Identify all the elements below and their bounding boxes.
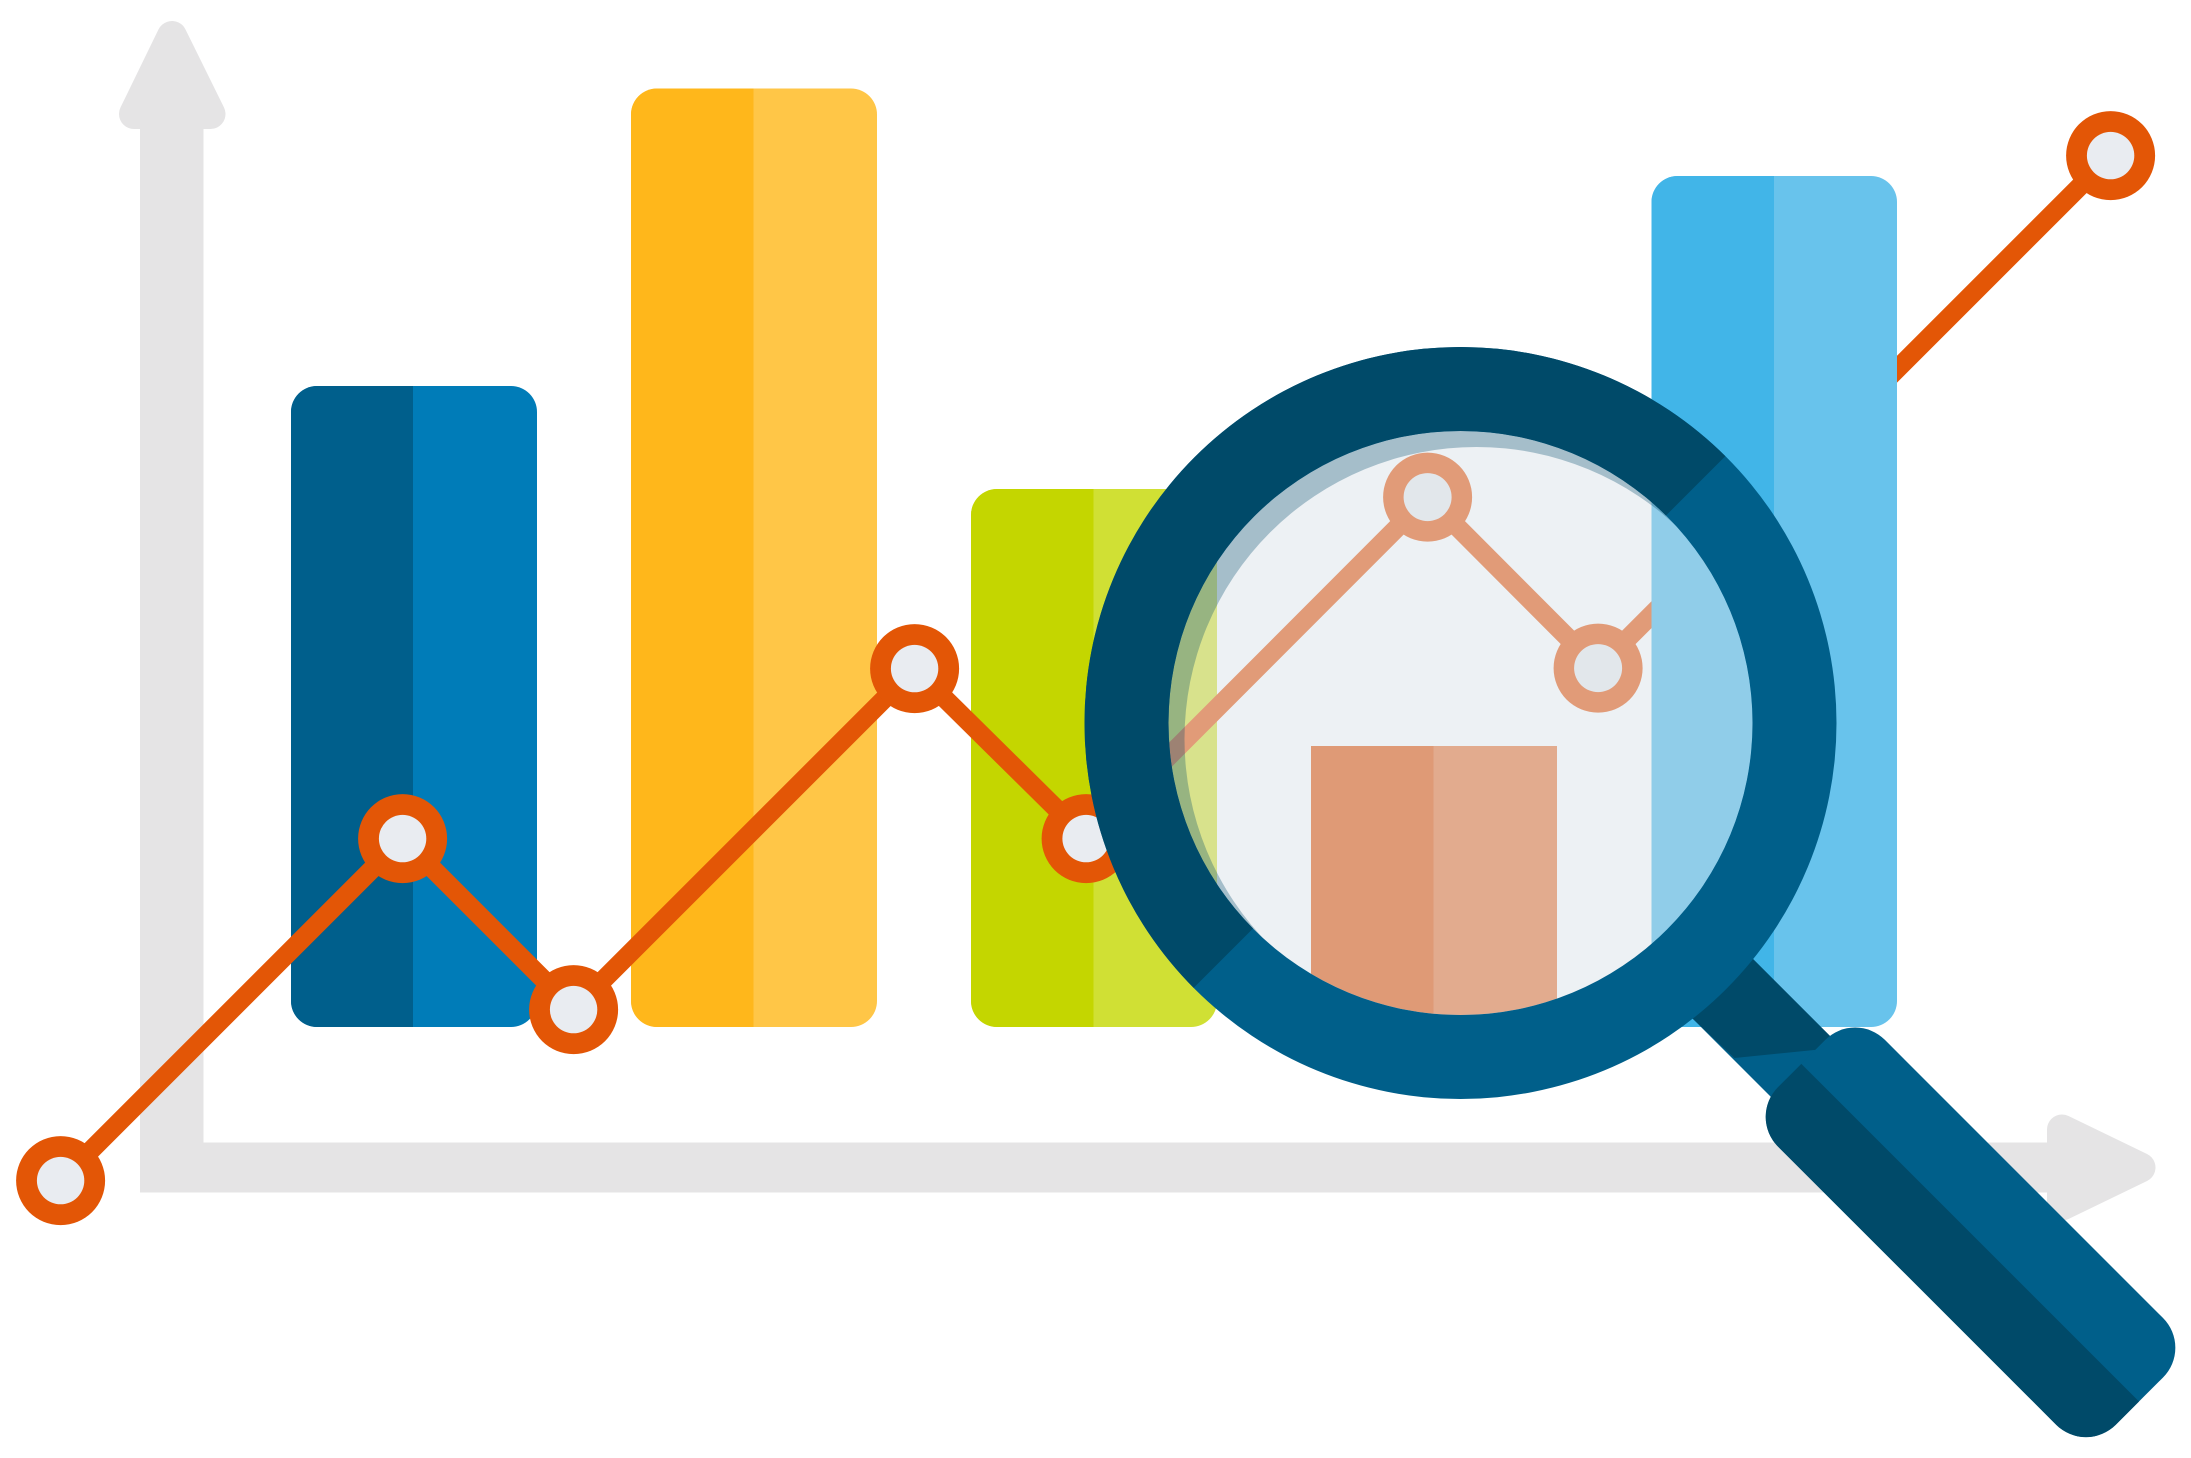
magnified node: dip (1554, 624, 1643, 713)
lens glass with magnified chart (1168, 431, 1752, 1015)
bar 2: yellow (631, 88, 877, 1027)
magnified node: peak (1383, 453, 1472, 542)
chart axes with arrowheads (134, 36, 2140, 1206)
trend line (61, 156, 2111, 1181)
magnifier grip (1748, 1010, 2191, 1455)
bar 3: green (971, 489, 1217, 1027)
bar 4: light blue (1652, 176, 1897, 1027)
line chart node markers (16, 111, 2155, 1225)
bar 1: blue (291, 386, 537, 1027)
magnified blue bar (1652, 502, 1752, 944)
magnified trend line (1170, 521, 1710, 766)
magnifier neck (1692, 958, 1832, 1098)
magnified orange bar (1311, 746, 1557, 1036)
lens inner shadow crescent (1168, 431, 1674, 938)
magnified green bar (1168, 562, 1217, 884)
magnifier ring (1084, 347, 1836, 1099)
